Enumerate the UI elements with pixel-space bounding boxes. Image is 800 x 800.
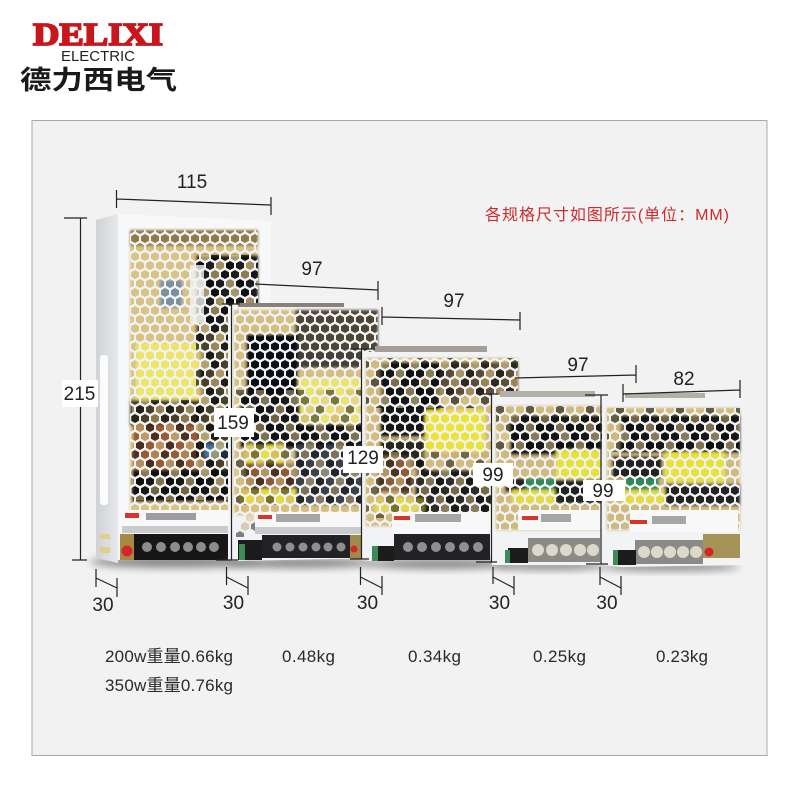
dimension: width 97 (third unit): 97 (443, 291, 465, 312)
product label strip (392, 512, 512, 533)
dimension: height 129 (343, 349, 383, 559)
product label strip (122, 510, 230, 534)
dimension: height 99 (fifth unit) (583, 395, 625, 564)
dimension: depth 30 (third unit) (357, 567, 382, 614)
dimension: depth 30 (first unit) (92, 569, 117, 616)
product label strip (630, 510, 738, 532)
dimension: height 99 (fourth unit) (473, 394, 513, 562)
note: size unit: 各规格尺寸如图所示(单位：MM) (485, 206, 729, 224)
dimension: depth 30 (fourth unit): 30 (489, 593, 510, 614)
dimension: width 82: 82 (673, 369, 695, 390)
terminal block (120, 534, 230, 560)
terminal block (505, 538, 600, 563)
product: 159 tall unit (225, 303, 380, 568)
product: 129 tall unit (362, 346, 520, 569)
dimension: depth 30 (fifth unit): 30 (596, 593, 618, 614)
panel: product dimensions (32, 120, 767, 756)
dimension: width 82 (623, 369, 740, 402)
dimension: height 159 (214, 304, 254, 560)
dimension: width 115 (116, 172, 271, 215)
dimension: depth 30 (fourth unit) (489, 567, 514, 614)
weight: fifth unit: 0.23kg (656, 647, 708, 666)
weight: first unit (105, 647, 233, 695)
terminal block (613, 534, 740, 565)
dimension: depth 30 (third unit): 30 (357, 593, 378, 614)
weight: third unit: 0.34kg (408, 647, 461, 666)
dimension: width 97 (fourth unit) (515, 355, 636, 383)
product: 97 wide small unit (492, 391, 606, 570)
dimension: height 215 (62, 218, 98, 560)
dimension: height 99 (fourth unit): 99 (482, 465, 504, 486)
logo wordmark: DELIXI (33, 16, 163, 52)
dimension: depth 30 (second unit) (223, 567, 248, 614)
logo: DELIXI Electric (20, 16, 177, 95)
terminal block (238, 535, 362, 560)
logo Chinese name: 德力西电气 (20, 65, 177, 95)
product label strip (518, 510, 606, 530)
weight: second unit: 0.48kg (282, 647, 335, 666)
logo subtitle: ELECTRIC (61, 48, 135, 65)
dimension: width 97 (third unit) (382, 291, 520, 330)
product label strip (255, 512, 380, 534)
weight: first unit: 200w重量0.66kg (105, 647, 233, 666)
dimension: height 129: 129 (347, 448, 379, 469)
terminal block (372, 534, 490, 561)
weight: first unit: 350w重量0.76kg (105, 676, 233, 695)
dimension: width 115: 115 (177, 172, 207, 193)
product: 115 wide unit (90, 214, 271, 568)
dimension: height 159: 159 (217, 413, 249, 434)
dimension: height 99 (fifth unit): 99 (592, 481, 614, 502)
weight: fourth unit: 0.25kg (533, 647, 586, 666)
product: 82 wide small unit (600, 393, 744, 571)
dimension: width 97 (fourth unit): 97 (567, 355, 589, 376)
dimension: depth 30 (fifth unit) (596, 567, 621, 614)
dimension: height 215: 215 (64, 384, 95, 405)
dimension: width 97 (second unit): 97 (301, 259, 323, 280)
dimension: depth 30 (first unit): 30 (92, 595, 114, 616)
dimension: width 97 (second unit) (255, 259, 378, 300)
dimension: depth 30 (second unit): 30 (223, 593, 244, 614)
